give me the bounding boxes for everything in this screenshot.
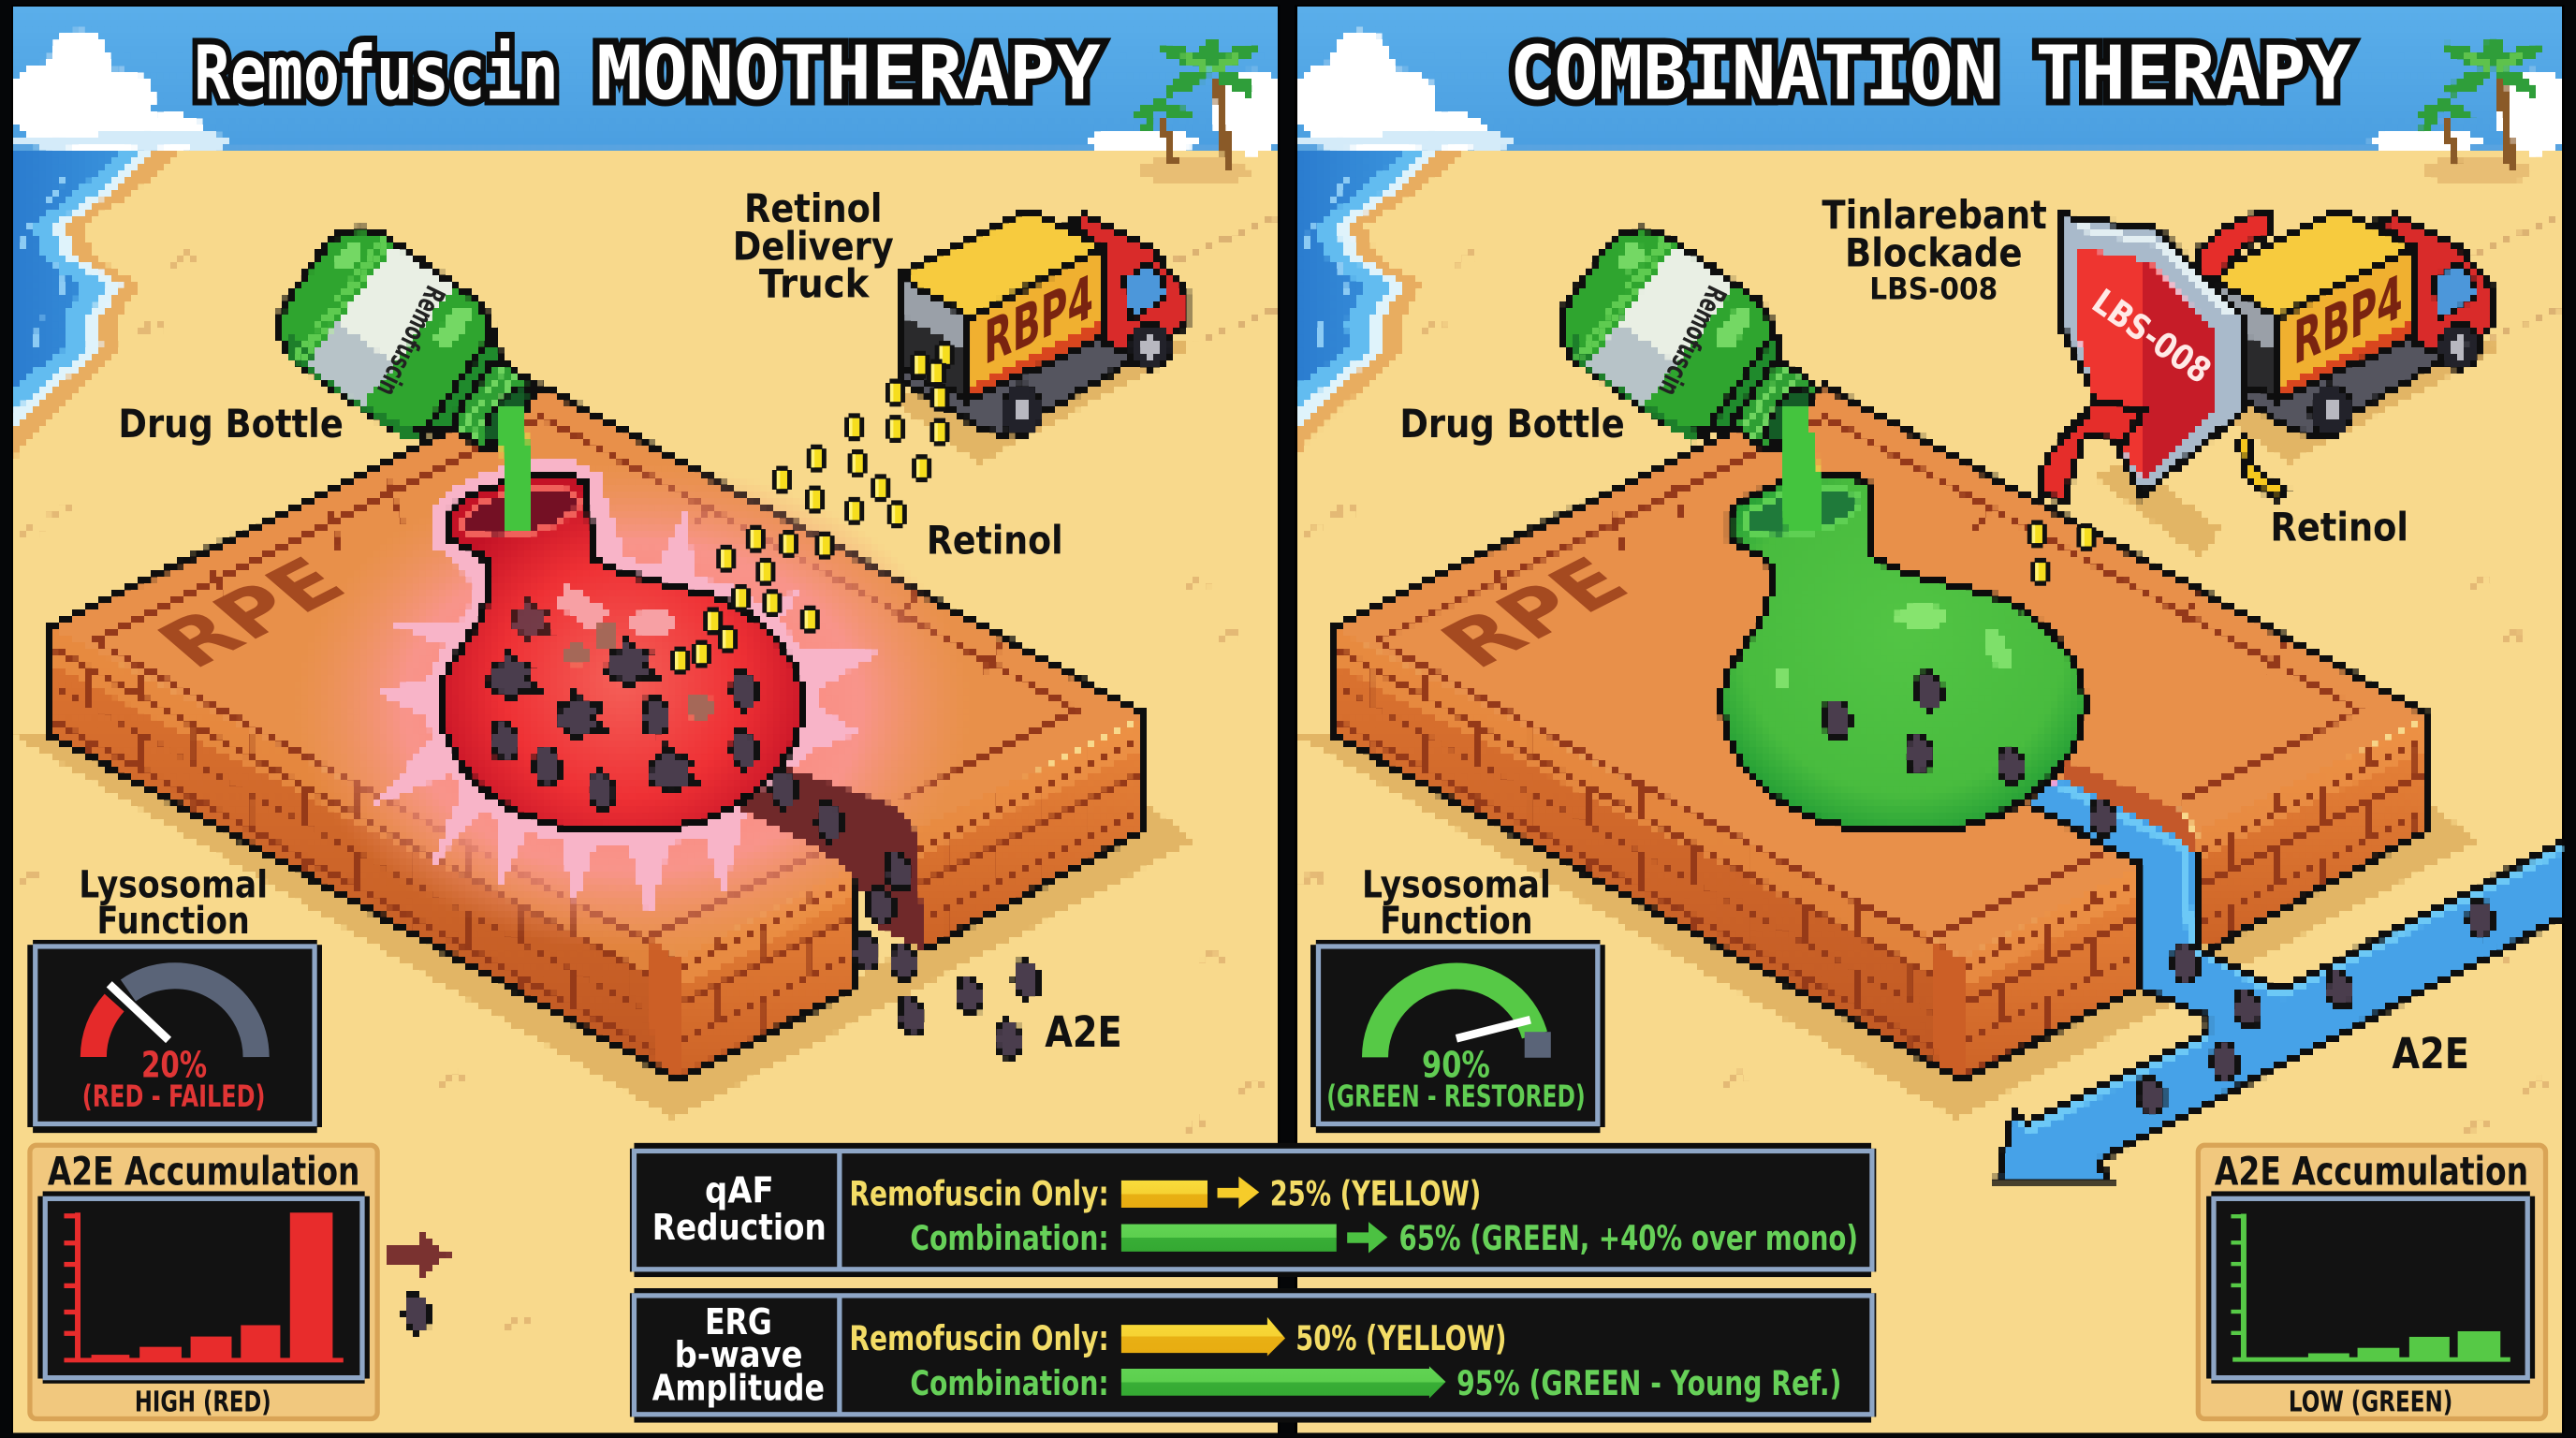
row heading [652,1170,827,1249]
label: Lysosomal Function, monotherapy [79,862,268,943]
LBS-008 shield lettering: LBS-008 [2085,281,2218,391]
green drug stream, monotherapy [500,404,533,529]
comparison panel: qAF reduction [630,1143,1876,1277]
residual A2E particles in green flask [1823,672,2024,785]
title: COMBINATION THERAPY [1510,30,2351,116]
row heading: b-wave [675,1334,803,1376]
comparison panel: ERG b-wave amplitude [630,1288,1876,1423]
gauge value: 20% [141,1044,207,1086]
RBP4 truck lettering, monotherapy: RBP4 [984,260,1093,379]
retinol particles flooding in [670,341,955,674]
RPE label, monotherapy: RPE [139,544,365,683]
Remofuscin only row: Remofuscin Only: [849,1173,1109,1213]
salmon glow and pink burst around failing lysosome [296,463,970,949]
Combination row [910,1218,1858,1258]
label: Tinlarebant Blockade LBS-008 [1822,192,2047,306]
label: A2E, combination: A2E [2392,1029,2469,1078]
truck: retinol delivery RBP4, blocked [2197,211,2500,463]
row heading: Amplitude [652,1367,825,1409]
label: Retinol Delivery Truck [733,185,894,307]
dark red export arrow [388,1229,450,1278]
gauge status: (RED - FAILED) [82,1080,265,1114]
title: Remofuscin MONOTHERAPY: Remofuscin [194,30,559,116]
gauge arc [94,976,256,1057]
Remofuscin only row: 25% (YELLOW) [1270,1173,1481,1213]
Remofuscin only row [849,1317,1506,1358]
row heading [652,1301,825,1409]
bar chart: high accumulation [64,1212,344,1362]
gauge value: 90% [1422,1044,1490,1086]
label: Tinlarebant Blockade LBS-008: Blockade [1845,229,2023,275]
panel heading: A2E Accumulation [48,1148,359,1194]
Remofuscin only row: Remofuscin Only: [849,1318,1109,1358]
label: Lysosomal Function, combination: Function [1380,899,1533,943]
title: COMBINATION THERAPY: COMBINATION [1510,30,1998,116]
leaking dark A2E channel through RPE [739,769,925,949]
label: Retinol Delivery Truck: Delivery [733,223,894,269]
title: Remofuscin MONOTHERAPY [194,30,1101,116]
Combination row: 65% (GREEN, +40% over mono) [1398,1218,1858,1258]
Remofuscin only row [849,1173,1481,1213]
label: Lysosomal Function, monotherapy: Lysosomal [79,862,268,906]
label: Lysosomal Function, combination [1362,862,1551,943]
gauge panel: lysosomal function 20% failed [27,940,322,1133]
scene: monotherapy beach background with ocean, clouds and palms [10,5,1292,1432]
green drug stream, combination [1781,404,1814,529]
remaining retinol particles [2027,520,2097,586]
lysosome flask, red and failing [440,473,803,829]
gauge status: (GREEN - RESTORED) [1326,1080,1586,1114]
chart caption: LOW (GREEN) [2289,1387,2452,1419]
lysosome flask, green and healthy [1721,431,2085,829]
row heading: Reduction [652,1207,827,1249]
brown channel bank beside the river [2060,759,2198,888]
label: Retinol Delivery Truck: Truck [759,261,870,307]
label: Retinol Delivery Truck: Retinol [744,185,882,231]
label: Drug Bottle, combination: Drug Bottle [1399,401,1625,447]
scene: combination beach background with ocean, clouds and palms [1293,5,2574,1432]
blue A2E clearance river and arrow [1998,779,2565,1180]
chart caption: HIGH (RED) [135,1387,271,1419]
RPE brick block, combination [1295,386,2478,1119]
gauge arc [1375,976,1534,1057]
gauge needle [110,984,168,1040]
truck: retinol delivery RBP4 [887,211,1191,463]
A2E particles escaping the flask [404,769,1040,1332]
bottle label text, combination: Remofuscin [1651,280,1733,401]
panel: A2E accumulation high [30,1145,377,1419]
label: Tinlarebant Blockade LBS-008: Tinlarebant [1822,192,2047,238]
RPE brick block, monotherapy [11,386,1194,1119]
tinlarebant shield with deflecting arrows [2039,213,2287,559]
gauge panel: lysosomal function 90% restored [1310,940,1605,1133]
label: Retinol, monotherapy: Retinol [927,517,1063,563]
title: Remofuscin MONOTHERAPY: MONOTHERAPY [596,30,1101,116]
row heading: ERG [705,1301,772,1343]
RPE label, combination: RPE [1423,544,1647,683]
Combination row: Combination: [910,1218,1109,1258]
panel: A2E accumulation low [2198,1145,2546,1419]
label: Lysosomal Function, combination: Lysosomal [1362,862,1551,906]
Remofuscin only row: 50% (YELLOW) [1295,1318,1506,1358]
Combination row [910,1363,1841,1403]
gauge remainder [1525,1032,1551,1058]
label: Retinol, combination: Retinol [2271,504,2408,550]
label: Tinlarebant Blockade LBS-008: LBS-008 [1869,272,1998,306]
label: Lysosomal Function, monotherapy: Function [97,899,250,943]
gauge needle [1456,1020,1530,1038]
drug bottle, monotherapy [261,211,564,488]
title: COMBINATION THERAPY: THERAPY [2036,30,2351,116]
row heading: qAF [705,1170,774,1212]
label: A2E, monotherapy: A2E [1045,1007,1122,1057]
Combination row: Combination: [910,1363,1109,1403]
label: Drug Bottle, monotherapy: Drug Bottle [118,401,344,447]
RBP4 truck lettering, combination: RBP4 [2293,260,2403,379]
drug bottle, combination [1543,211,1845,488]
bar chart: low accumulation [2231,1213,2510,1362]
bottle label text, monotherapy: Remofuscin [370,280,451,401]
Combination row: 95% (GREEN - Young Ref.) [1456,1363,1841,1403]
